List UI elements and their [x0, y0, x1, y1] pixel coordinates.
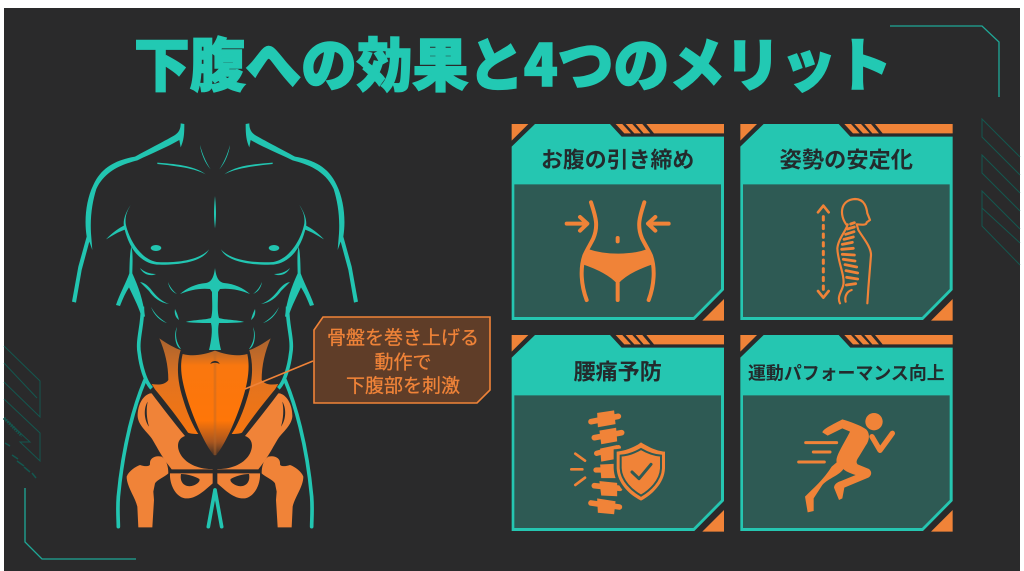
corner bracket: bottom left	[25, 488, 136, 559]
heading: 腰痛予防	[573, 360, 662, 385]
icon: spine with shield	[571, 411, 668, 514]
panel: 姿勢の安定化	[740, 124, 953, 321]
heading: 姿勢の安定化	[780, 148, 913, 173]
anatomy figure	[72, 123, 358, 527]
title: 下腹への効果と4つのメリット	[134, 19, 892, 103]
icon: posture and spine	[818, 199, 871, 303]
panel: お腹の引き締め	[512, 124, 724, 321]
icon: waist	[567, 202, 669, 300]
decorative stripes: left	[4, 346, 40, 478]
upper torso outline	[72, 123, 358, 317]
corner bracket: top right	[890, 26, 999, 97]
callout: pelvis tilt	[245, 317, 490, 403]
panel: 腰痛予防	[512, 335, 724, 532]
icon: runner	[799, 413, 892, 512]
decorative stripes: right	[982, 119, 1020, 265]
callout: pelvis tilt: 下腹部を刺激	[346, 375, 460, 397]
pelvis and highlighted lower abdominal muscle	[118, 307, 312, 527]
panel: 運動パフォーマンス向上	[740, 335, 953, 532]
heading: 運動パフォーマンス向上	[748, 364, 945, 384]
abdominal lines	[140, 268, 290, 350]
heading: お腹の引き締め	[541, 148, 694, 173]
callout: pelvis tilt: 動作で	[374, 352, 432, 374]
callout: pelvis tilt: 骨盤を巻き上げる	[327, 327, 479, 349]
